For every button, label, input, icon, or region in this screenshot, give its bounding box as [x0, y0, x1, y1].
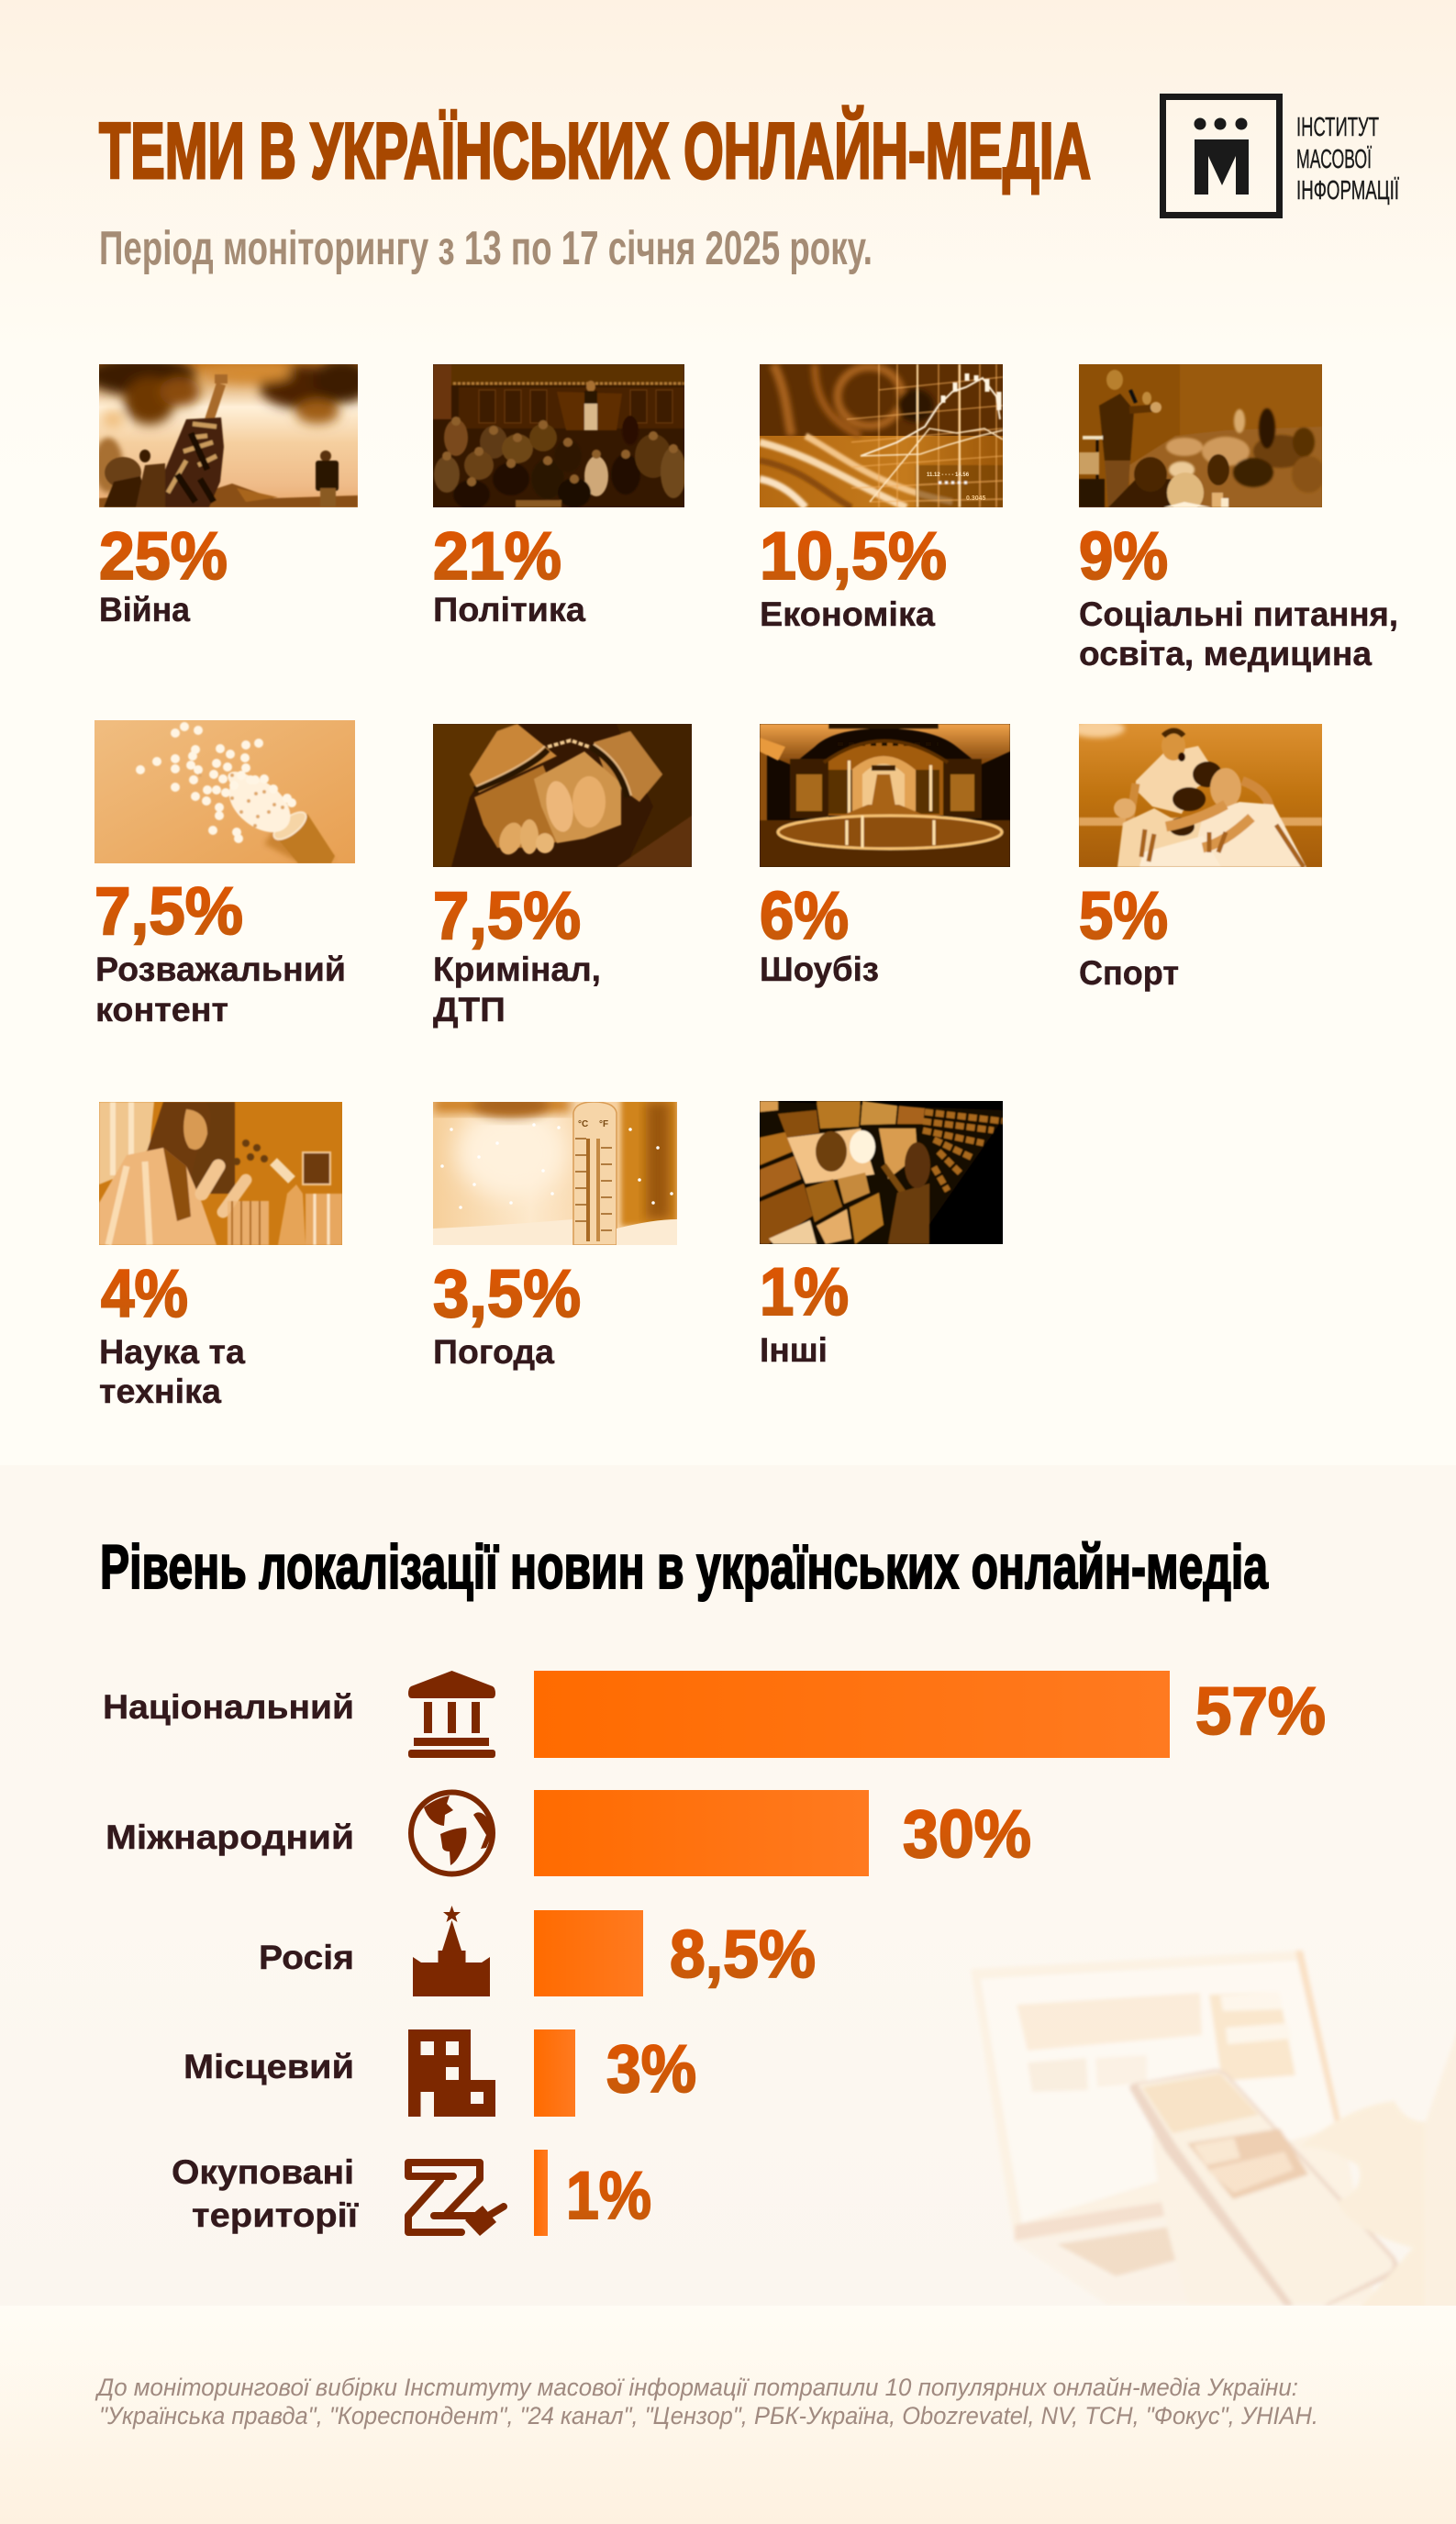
logo: Institute of Mass Information — [1163, 97, 1399, 215]
label: science and technology — [99, 1333, 245, 1410]
row: national: Національний — [103, 1688, 354, 1726]
value: social issues share: 9% — [1079, 519, 1168, 594]
photo: thermometer in snow — [433, 1102, 677, 1245]
value: crime share: 7,5% — [433, 879, 581, 953]
label: entertainment content — [95, 951, 346, 1029]
value: occupied territories: 1% — [566, 2159, 651, 2233]
photo: thermometer in snow: °C — [578, 1119, 588, 1129]
label: crime, road accidents — [433, 951, 601, 1029]
icon: kremlin tower — [413, 1906, 490, 1996]
label: crime, road accidents: ДТП — [433, 991, 506, 1029]
row: occupied territories: Окуповані — [172, 2153, 354, 2191]
value: politics share: 21% — [433, 519, 561, 594]
value: other share: 1% — [760, 1255, 849, 1329]
photo: scientist in laboratory — [99, 1102, 342, 1245]
value: entertainment share: 7,5% — [94, 874, 243, 949]
row: international: Міжнародний — [106, 1818, 354, 1856]
logo: Institute of Mass Information: МАСОВОЇ — [1296, 145, 1372, 174]
bar: occupied territories 1 percent — [534, 2150, 548, 2236]
label: crime, road accidents: Кримінал, — [433, 951, 601, 988]
label: other: Інші — [760, 1331, 828, 1369]
label: weather: Погода — [433, 1333, 554, 1371]
icon: globe — [411, 1793, 493, 1874]
subtitle: Період моніторингу з 13 по 17 січня 2025 року. — [99, 222, 872, 275]
value: war share: 25% — [99, 519, 228, 594]
icon: Z painted over with brush — [408, 2163, 504, 2236]
photo: economy, financial chart: 11.12 - - - - 14.56 — [927, 473, 970, 478]
photo: show stage — [760, 724, 1010, 867]
photo: popcorn spilled from cup — [94, 720, 355, 863]
value: showbiz share: 6% — [760, 879, 849, 953]
value: local: 3% — [606, 2032, 696, 2107]
label: science and technology: Наука та — [99, 1333, 245, 1371]
value: national: 57% — [1195, 1674, 1326, 1749]
label: showbiz: Шоубіз — [760, 951, 879, 988]
photo: economy, financial chart — [760, 364, 1003, 507]
bar: russia 8.5 percent — [534, 1910, 643, 1996]
footnote: monitoring sample: "Українська правда", "Кореспондент", "24 канал", "Цензор", РБК-Україна, Obozrevatel, NV, TCH, "Фокус", УНІАН. — [99, 2402, 1318, 2429]
value: weather share: 3,5% — [433, 1257, 581, 1331]
row: local: Місцевий — [183, 2048, 354, 2085]
photo: person at video wall — [760, 1101, 1003, 1244]
row: russia — [259, 1906, 816, 1996]
bar: local 3 percent — [534, 2029, 575, 2117]
footnote: monitoring sample — [94, 2374, 1318, 2429]
icon: government building — [408, 1671, 495, 1758]
bar: international 30 percent — [534, 1790, 869, 1876]
logo: Institute of Mass Information: ІНСТИТУТ — [1296, 113, 1379, 142]
image: laptop and phone with news, faded — [973, 1949, 1456, 2306]
photo: war, howitzer firing — [99, 364, 358, 507]
label: social issues, education, medicine: освіта, медицина — [1079, 635, 1372, 673]
label: entertainment content: контент — [95, 991, 228, 1029]
value: sport share: 5% — [1079, 879, 1168, 953]
row: occupied territories — [172, 2150, 651, 2236]
footnote: monitoring sample: До моніторингової вибірки Інституту масової інформації потрапили 10 популярних онлайн-медіа України: — [94, 2374, 1298, 2401]
value: russia: 8,5% — [670, 1918, 816, 1992]
photo: speaker and audience — [1079, 364, 1322, 507]
value: science share: 4% — [101, 1257, 188, 1331]
row: occupied territories: території — [192, 2196, 360, 2234]
row: national — [103, 1671, 1326, 1758]
photo: thermometer in snow: °F — [599, 1119, 608, 1129]
row: international — [106, 1790, 1031, 1876]
photo: parliament session — [433, 364, 684, 507]
label: entertainment content: Розважальний — [95, 951, 346, 988]
photo: handcuffed hands — [433, 724, 692, 867]
photo: economy, financial chart: 0.3045 — [966, 495, 986, 502]
label: war: Війна — [99, 591, 190, 628]
label: social issues, education, medicine — [1079, 595, 1398, 673]
label: science and technology: техніка — [99, 1373, 221, 1410]
bar: national 57 percent — [534, 1671, 1170, 1758]
panel: news localisation — [0, 1465, 1456, 2321]
row: local — [183, 2029, 696, 2117]
label: sport: Спорт — [1079, 954, 1179, 992]
logo: Institute of Mass Information: ІНФОРМАЦІЇ — [1296, 176, 1399, 206]
icon: city buildings — [408, 2029, 495, 2117]
photo: football team celebrating — [1079, 724, 1322, 867]
label: social issues, education, medicine: Соціальні питання, — [1079, 595, 1398, 633]
label: economy: Економіка — [760, 595, 935, 633]
value: international: 30% — [903, 1797, 1031, 1872]
label: politics: Політика — [433, 591, 585, 628]
row: russia: Росія — [259, 1939, 354, 1976]
value: economy share: 10,5% — [760, 519, 947, 594]
